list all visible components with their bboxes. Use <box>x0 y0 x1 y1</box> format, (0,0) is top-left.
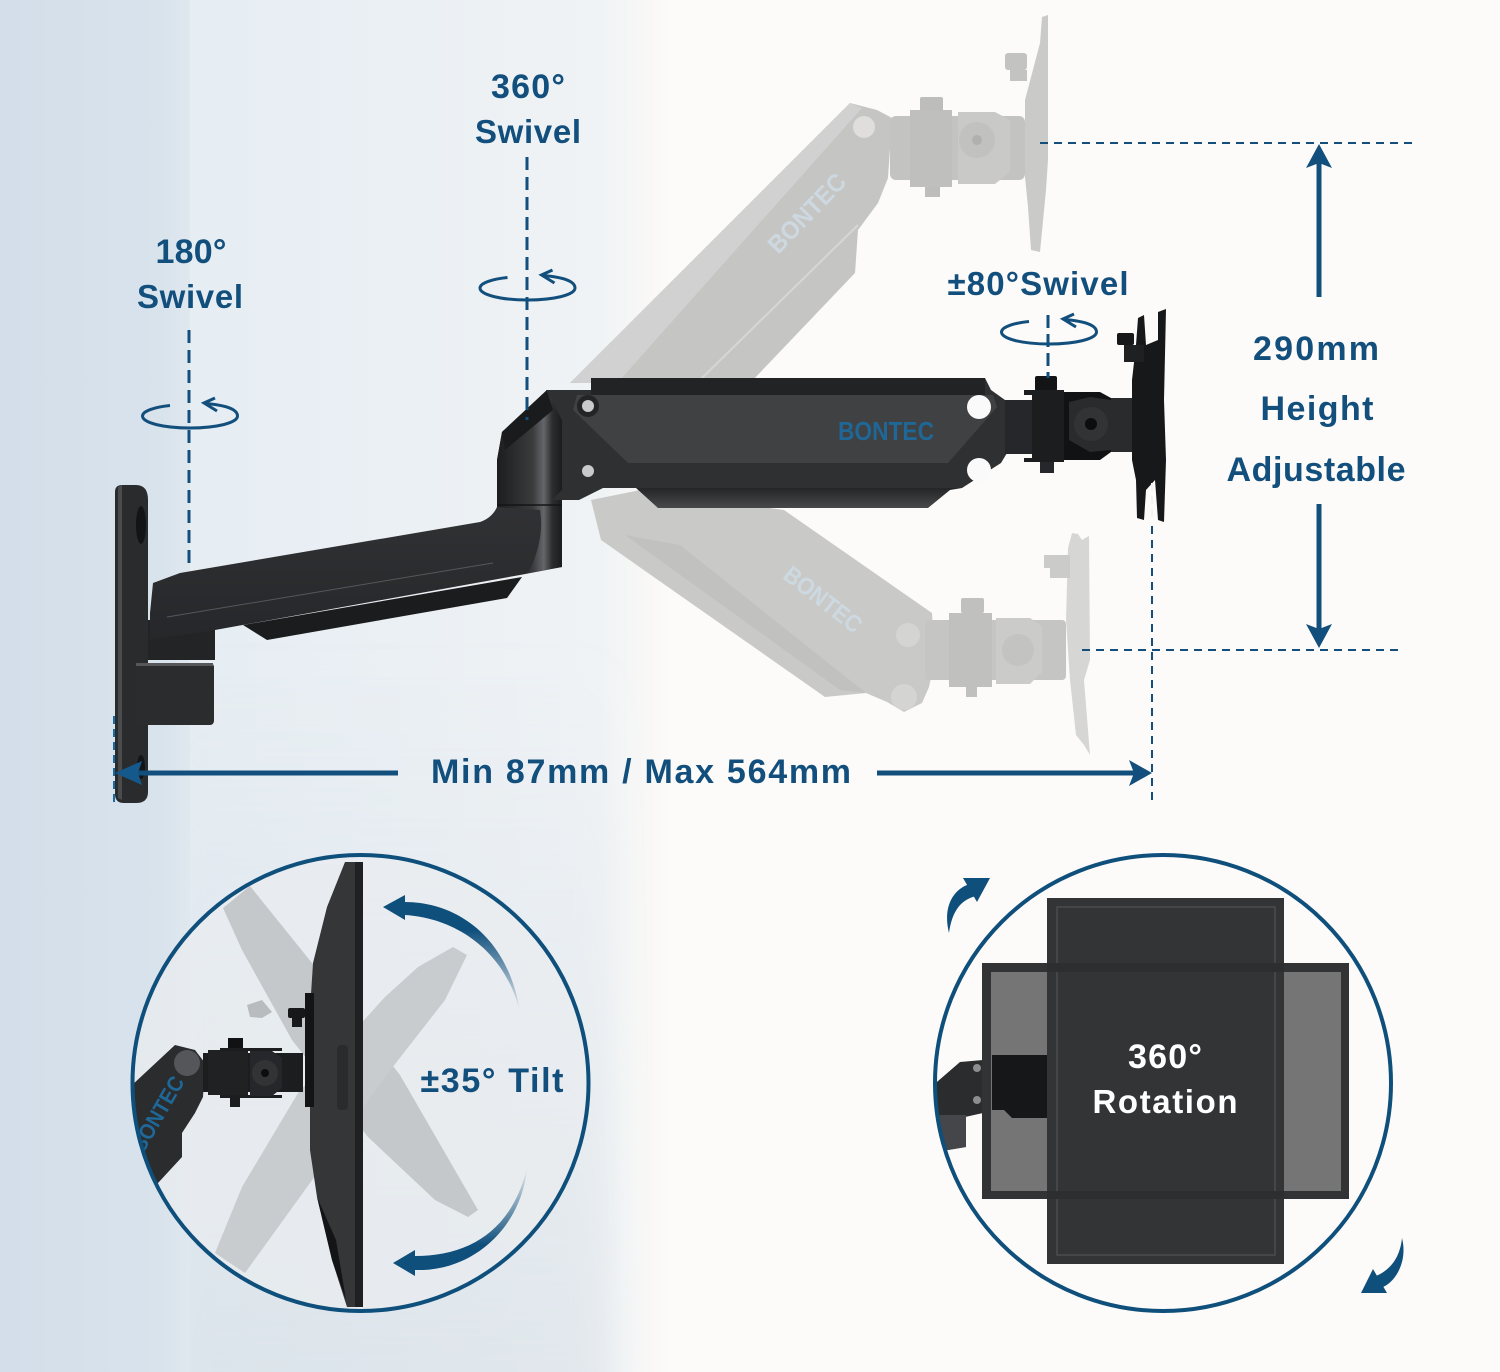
tilt head <box>203 1008 305 1107</box>
label: 180 swivel <box>137 233 243 570</box>
dimension: reach <box>114 483 1152 806</box>
rotation label: Rotation <box>1092 1083 1238 1120</box>
mount: upper arm with gas spring <box>546 378 1007 508</box>
panel: tilt detail <box>126 855 588 1311</box>
label: 180 swivel: Swivel <box>137 278 243 315</box>
label: 180 swivel: 180° <box>156 233 226 271</box>
tilt arrow up <box>383 895 520 1012</box>
label: 80 swivel <box>948 265 1128 378</box>
dimension: height adjustable: Adjustable <box>1226 451 1406 489</box>
rotation arm <box>937 1060 982 1150</box>
dimension: height adjustable: 290mm <box>1253 330 1379 368</box>
dimension: reach: Min 87mm / Max 564mm <box>431 753 851 791</box>
rotation label: 360° <box>1128 1038 1202 1076</box>
tilt label: ±35° Tilt <box>420 1062 564 1100</box>
tilt arm <box>130 1045 205 1183</box>
ghost logo top: BONTEC <box>762 168 852 259</box>
ghost monitor: tilted down <box>215 947 467 1273</box>
label: 360 swivel <box>475 68 581 420</box>
rotation label <box>1092 1038 1238 1120</box>
ghost bracket <box>247 1000 272 1018</box>
monitor portrait <box>1047 898 1284 1264</box>
rotation arrow bottom <box>1361 1238 1404 1293</box>
dimension: height adjustable <box>1040 143 1412 650</box>
ghost arm: lowered position <box>591 490 1090 755</box>
panel: rotation detail <box>930 855 1404 1311</box>
tilt arrow down <box>393 1168 527 1276</box>
monitor side view <box>305 862 363 1307</box>
label: 80 swivel: ±80°Swivel <box>948 265 1128 302</box>
mount: lower arm <box>135 390 562 725</box>
rotation arrow top <box>947 878 990 933</box>
mount: tilt head and VESA plate <box>1005 309 1166 522</box>
arm logo: BONTEC <box>838 416 934 446</box>
mount: wall plate <box>115 485 148 803</box>
tilt arm logo: BONTEC <box>126 1072 189 1157</box>
label: 360 swivel: 360° <box>491 68 565 106</box>
monitor landscape <box>982 963 1349 1199</box>
label: 360 swivel: Swivel <box>475 113 581 150</box>
ghost monitor: tilted up <box>223 886 478 1217</box>
ghost logo bottom: BONTEC <box>778 561 867 639</box>
ghost arm: raised position <box>570 15 1048 383</box>
dimension: height adjustable: Height <box>1260 390 1374 428</box>
